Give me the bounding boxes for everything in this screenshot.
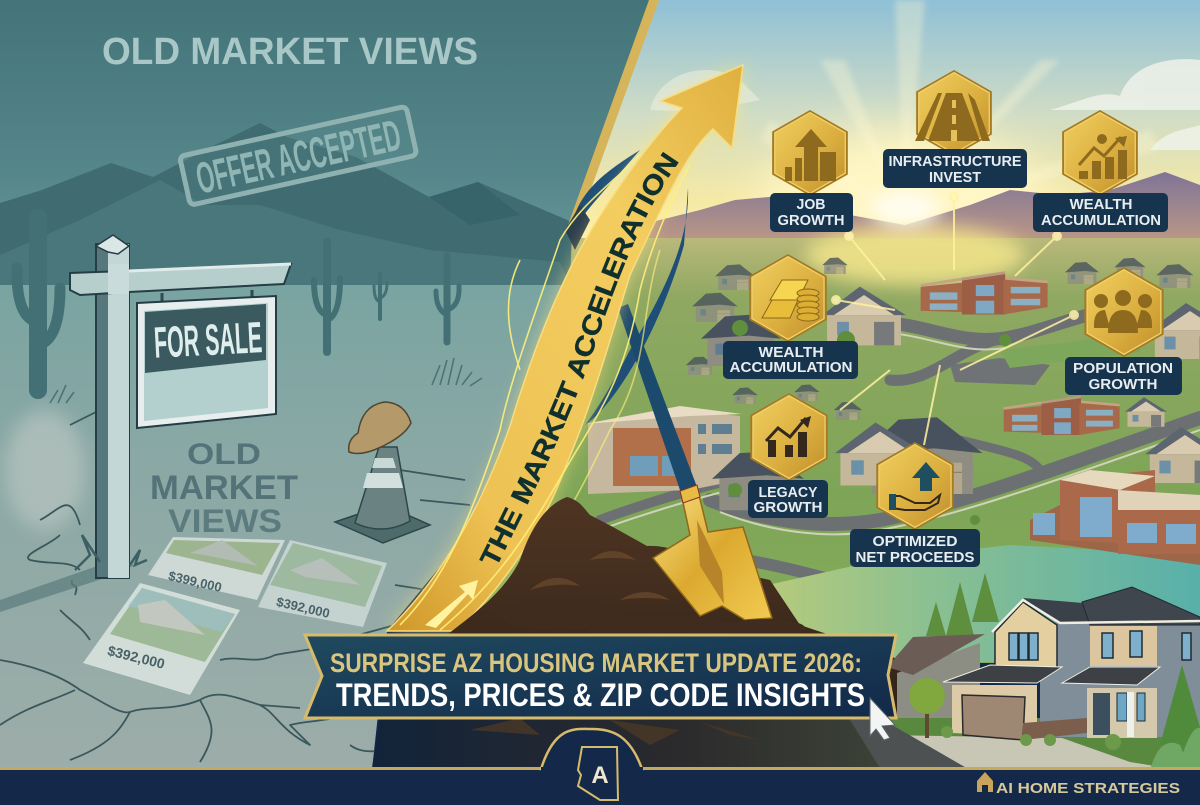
parking lot (950, 358, 1050, 385)
house: center front (835, 422, 925, 486)
hanging hooks (162, 290, 252, 306)
sign board: FOR SALE (153, 313, 263, 368)
arizona outline with A (578, 747, 618, 800)
label: ACCUMULATION (730, 360, 852, 376)
label: ACCUMULATION (1041, 213, 1161, 229)
label (748, 480, 828, 518)
cursor icon (870, 698, 895, 740)
horizon glow on land (805, 225, 1025, 285)
front door (1093, 693, 1110, 735)
label (1033, 193, 1168, 232)
dirt clods front (500, 599, 805, 640)
blade (653, 487, 772, 620)
panel: modern market background (480, 0, 1200, 663)
sun core (871, 190, 939, 226)
label: INVEST (929, 170, 981, 186)
house: right edge upper (1150, 303, 1200, 359)
sky (540, 0, 1200, 250)
label: INFRASTRUCTURE (888, 154, 1022, 170)
sign shadow (0, 565, 135, 612)
label: GROWTH (754, 500, 822, 516)
cone (335, 447, 430, 543)
neighbor house (897, 643, 980, 720)
house: right edge lower (1145, 427, 1200, 483)
arch emblem: A (591, 762, 609, 789)
upper tan panel (1090, 626, 1157, 666)
cactus: middle (314, 242, 340, 352)
label (770, 193, 853, 232)
small tree (909, 678, 945, 738)
house: small right (1125, 397, 1167, 427)
label (723, 341, 858, 379)
badge: wealth accumulation right (1033, 110, 1168, 232)
agave shrubs (50, 358, 482, 403)
garage wall (952, 685, 1037, 737)
cactus: big left (17, 218, 60, 390)
mountains (0, 123, 572, 285)
cone with hard hat (335, 402, 430, 543)
hedges (941, 726, 1121, 750)
icon: people (1094, 290, 1152, 333)
badge: wealth accumulation left (723, 254, 858, 379)
grass at base (75, 535, 147, 570)
footer house icon (977, 772, 993, 792)
dirt mound (380, 497, 900, 768)
listing card: 392k left (83, 583, 240, 695)
garage door (962, 695, 1025, 740)
stacked label: old market views: VIEWS (168, 503, 282, 539)
sunburst connectors (832, 193, 1078, 445)
gold divider line (568, 0, 659, 225)
front house (800, 573, 1200, 770)
label: NET PROCEEDS (856, 550, 975, 566)
icon: rising chart (1079, 134, 1127, 179)
shovel handle (618, 304, 697, 493)
stacked label: old market views (150, 438, 298, 539)
footer bar (0, 729, 1200, 805)
land (480, 238, 1200, 663)
listing card: 392k left: $392,000 (106, 642, 167, 672)
sign board (137, 296, 276, 428)
badge: infrastructure invest (883, 70, 1027, 188)
distant houses (686, 258, 1194, 420)
arrow label (494, 150, 688, 572)
leafy bush (1150, 728, 1200, 770)
icon: gold bars and coins (762, 280, 819, 321)
ground cracks (0, 400, 470, 765)
clouds (650, 59, 1200, 150)
garage roof (943, 665, 1062, 683)
badge: optimized net proceeds (850, 442, 980, 567)
gable front (995, 602, 1057, 668)
dust haze (5, 410, 85, 530)
listing card: 399k (148, 537, 285, 600)
lightning arcs (400, 155, 690, 630)
icon: house chart (766, 416, 811, 457)
small arrow (425, 580, 478, 628)
cacti (17, 218, 459, 390)
building: left (584, 406, 742, 494)
teal lower sky behind house (700, 545, 1200, 662)
cypress front (1160, 665, 1200, 745)
roof (1023, 598, 1092, 623)
porch roof (1062, 667, 1160, 685)
gold shovel (653, 485, 772, 620)
building: bottom right (1030, 470, 1200, 565)
market acceleration arrow (384, 63, 749, 634)
ground strip (860, 718, 1200, 770)
road edge (800, 718, 970, 770)
cypress trees (926, 573, 999, 636)
listing card: 392k right: $392,000 (275, 594, 331, 621)
banner line two: TRENDS, PRICES & ZIP CODE INSIGHTS (336, 677, 865, 713)
stacked label: old market views: MARKET (150, 469, 298, 507)
label (883, 149, 1027, 188)
sun glow (755, 130, 1055, 300)
house: center (862, 417, 982, 494)
stone base (1023, 718, 1087, 740)
icon: road (915, 93, 990, 141)
sign post (96, 235, 129, 578)
label (1065, 357, 1182, 395)
main wall (1040, 622, 1200, 737)
label: GROWTH (778, 213, 844, 229)
mountains (600, 172, 1200, 250)
banner line one: SURPRISE AZ HOUSING MARKET UPDATE 2026: (330, 648, 862, 678)
label: JOB (796, 197, 826, 213)
arrow body (387, 65, 743, 631)
house: left of wealth (822, 287, 906, 345)
lower dark zone (372, 716, 880, 768)
porch (1087, 688, 1157, 738)
icon: hand and arrow (889, 462, 940, 510)
sun rays (760, 0, 1160, 215)
cactus: right (436, 256, 459, 342)
banner: title (305, 635, 896, 718)
porch pillar (1127, 692, 1134, 737)
stacked label: old market views: OLD (187, 438, 261, 471)
badge: job growth (770, 110, 853, 232)
porch windows (1117, 693, 1145, 721)
lawn strip (1000, 330, 1140, 368)
footer brand: AI HOME STRATEGIES (996, 780, 1180, 797)
label: WEALTH (1070, 197, 1132, 213)
upper windows (1009, 631, 1191, 660)
badge: population growth (1065, 267, 1182, 395)
ground (0, 285, 570, 770)
arch emblem (541, 729, 643, 800)
label (850, 529, 980, 567)
label: OPTIMIZED (872, 534, 958, 550)
banner plate (305, 635, 896, 718)
label: GROWTH (1088, 377, 1158, 393)
label: POPULATION (1073, 361, 1173, 377)
buildings (584, 271, 1200, 510)
lower dirt (470, 718, 760, 745)
dirt lumps (500, 551, 670, 620)
badge: legacy growth (748, 393, 828, 518)
building: top center (921, 271, 1048, 314)
crossbar (70, 264, 291, 295)
roads (600, 308, 1200, 585)
blade spine (697, 520, 724, 604)
house: wealth left (701, 315, 781, 366)
left sky (0, 0, 650, 290)
section title: OLD MARKET VIEWS (102, 31, 478, 73)
trees (728, 320, 1011, 525)
sidewalks (600, 332, 1200, 534)
for sale sign (70, 235, 291, 578)
collar (680, 485, 700, 503)
building: mid right (1004, 395, 1120, 435)
panel: old market views (0, 0, 650, 770)
driveway (885, 735, 1180, 770)
hard hat (349, 402, 411, 453)
listing card: 392k right (258, 540, 387, 627)
glow (387, 65, 743, 631)
stamp: offer accepted: OFFER ACCEPTED (192, 111, 405, 204)
label: WEALTH (758, 345, 824, 361)
icon: arrow and building (785, 129, 836, 181)
house: lower left (712, 451, 804, 510)
cactus: small (374, 274, 387, 319)
listing card: 399k: $399,000 (167, 568, 223, 595)
stamp: offer accepted (180, 106, 417, 206)
navy ribbons (450, 150, 688, 570)
label: LEGACY (758, 485, 818, 501)
market acceleration arrow: THE MARKET ACCELERATION (479, 152, 679, 562)
